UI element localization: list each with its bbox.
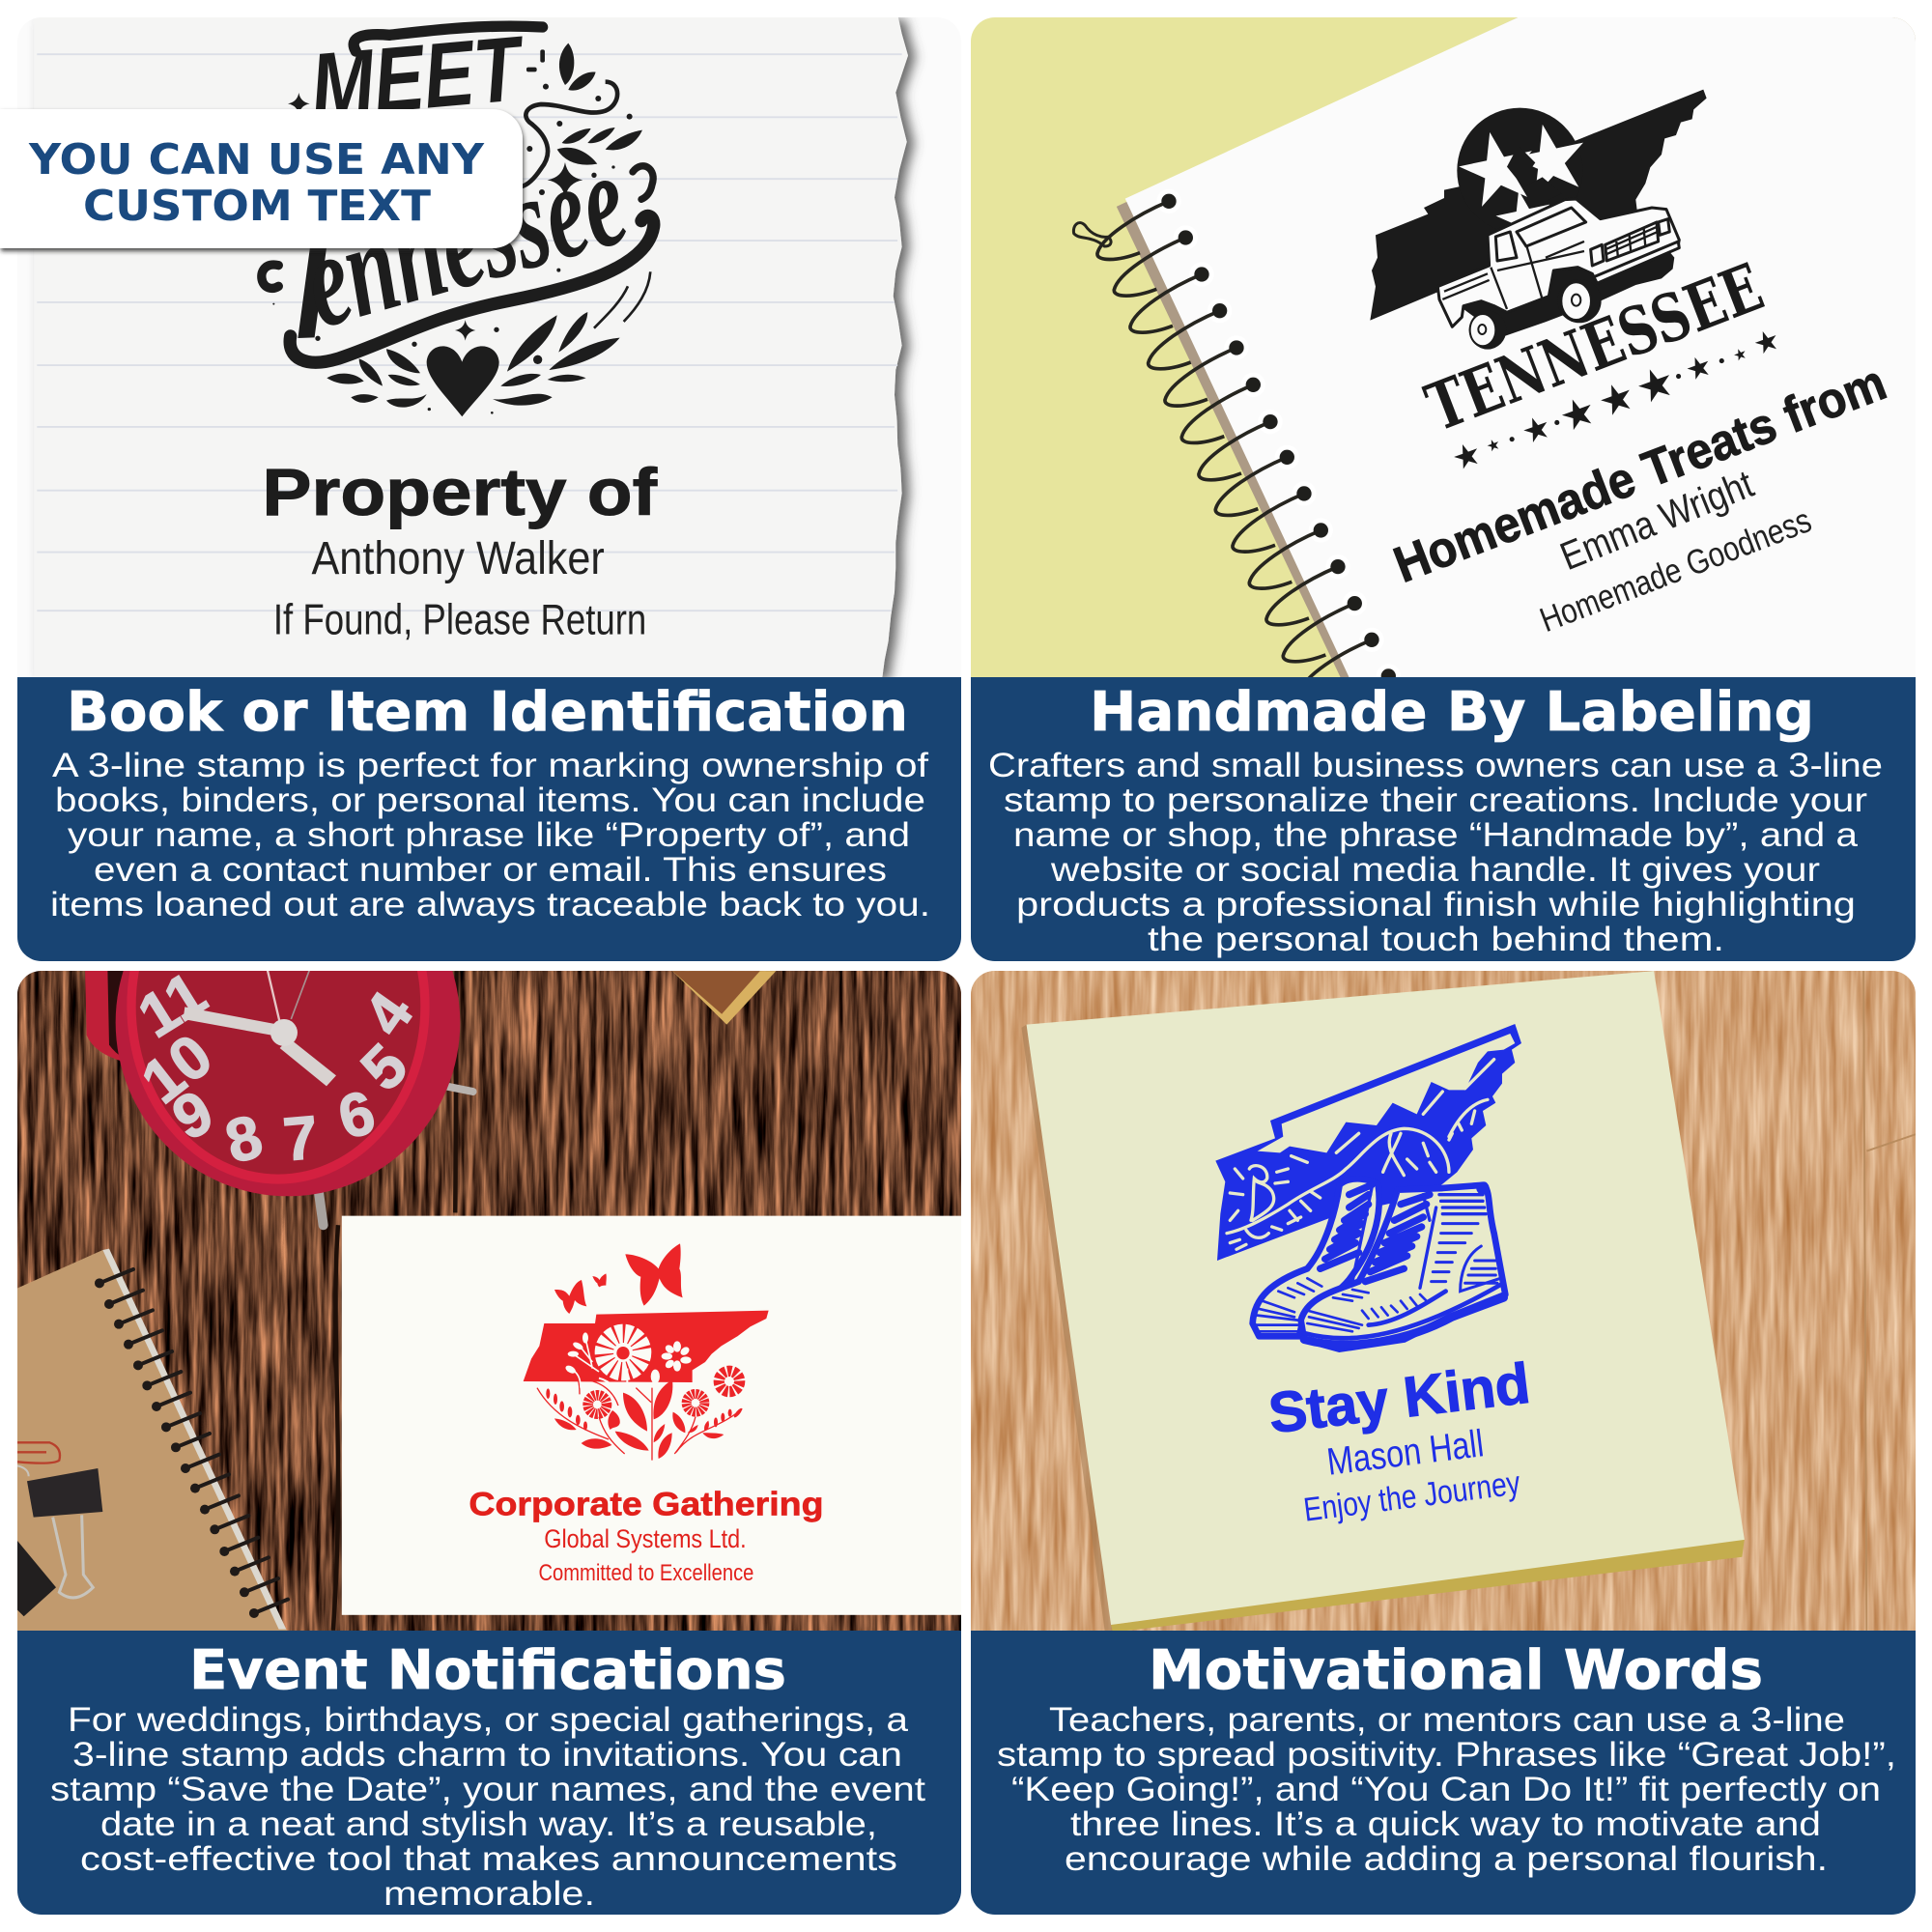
stamp text: Global Systems Ltd.: Global Systems Ltd.: [544, 1524, 747, 1553]
kraft notebook with binding and clips: [14, 1249, 288, 1633]
caption band: [971, 677, 1916, 961]
stamp artwork: Meet Tennessee lettering: MEET: [307, 17, 529, 138]
callout: you can use any custom text: CUSTOM TEXT: [83, 182, 431, 231]
body text: memorable.: [384, 1875, 595, 1913]
stamp artwork: Meet Tennessee lettering: T: [254, 150, 383, 384]
body text: products a professional finish while highlighting: [1016, 886, 1856, 923]
body text: [50, 747, 930, 923]
icon: Tennessee state with tri-star and pickup truck: [1370, 90, 1707, 350]
stamp text: If Found, Please Return: If Found, Please Return: [273, 596, 646, 643]
caption band: [17, 677, 961, 961]
stamp text: Enjoy the Journey: Enjoy the Journey: [1301, 1464, 1522, 1529]
icon: Tennessee with hiking boots: [1215, 1024, 1521, 1350]
photo: torn lined paper with stamp: [34, 17, 908, 678]
body text: date in a neat and stylish way. It’s a reusable,: [100, 1805, 877, 1843]
body text: Teachers, parents, or mentors can use a 3-line: [1049, 1701, 1845, 1739]
body text: website or social media handle. It gives your: [1050, 851, 1820, 889]
body text: the personal touch behind them.: [1148, 921, 1724, 958]
icon: red alarm clock: 9: [162, 1078, 224, 1153]
stamp text: Homemade Treats from: Homemade Treats from: [1387, 355, 1893, 594]
icon: red alarm clock: 4: [352, 980, 426, 1047]
icon: red alarm clock: 6: [331, 1078, 382, 1152]
panel: book or item identification: [17, 17, 961, 961]
stamp text group: [1387, 247, 1893, 639]
panel: motivational words: [971, 971, 1918, 1915]
photo: sticky note on light wood: [971, 971, 1918, 1633]
stamp artwork: Meet Tennessee lettering: [254, 17, 654, 416]
heading: Book or Item Identification: [67, 681, 908, 744]
body text: even a contact number or email. This ensures: [94, 851, 887, 889]
photo: spiral notebook on yellow: [966, 13, 1928, 685]
panel: handmade by labeling: [966, 13, 1928, 961]
body text: books, binders, or personal items. You can include: [55, 781, 925, 819]
white card: [342, 1216, 965, 1615]
body text: For weddings, birthdays, or special gatherings, a: [68, 1701, 909, 1739]
body text: [50, 1701, 925, 1913]
body text: stamp to personalize their creations. Include your: [1004, 781, 1867, 819]
body text: “Keep Going!”, and “You Can Do It!” fit perfectly on: [1011, 1771, 1881, 1808]
stamp text: Emma Wright: Emma Wright: [1554, 461, 1760, 579]
icon: red alarm clock: 8: [218, 1102, 270, 1177]
stamp text: Committed to Excellence: Committed to Excellence: [538, 1560, 753, 1586]
body text: your name, a short phrase like “Property of”, and: [68, 816, 910, 854]
body text: three lines. It’s a quick way to motivate and: [1070, 1805, 1821, 1843]
caption band: [971, 1631, 1916, 1915]
icon: red alarm clock: 5: [349, 1032, 420, 1103]
leather book corner: [672, 971, 776, 1025]
body text: encourage while adding a personal flourish.: [1065, 1840, 1828, 1878]
body text: Crafters and small business owners can use a 3-line: [988, 747, 1883, 784]
heading: Event Notifications: [189, 1639, 786, 1702]
stamp text: Corporate Gathering: Corporate Gathering: [469, 1486, 824, 1522]
photo: wooden desk background: [17, 971, 963, 1631]
stamp text: Property of: Property of: [262, 455, 658, 529]
stamp text: Anthony Walker: Anthony Walker: [311, 532, 605, 584]
stamp text: TENNESSEE: TENNESSEE: [1416, 247, 1773, 446]
callout: you can use any custom text: YOU CAN USE ANY: [28, 135, 485, 185]
notebook spiral binding: [1073, 189, 1401, 734]
icon: red alarm clock: 7: [281, 1104, 321, 1174]
stamp text: Stay Kind: Stay Kind: [1265, 1352, 1533, 1445]
body text: stamp to spread positivity. Phrases like “Great Job!”,: [997, 1736, 1896, 1774]
body text: [988, 747, 1883, 958]
stars row: [1451, 327, 1780, 470]
stamp text: Mason Hall: Mason Hall: [1324, 1422, 1486, 1484]
caption band: [17, 1631, 961, 1915]
body text: name or shop, the phrase “Handmade by”, and a: [1013, 816, 1859, 854]
icon: red alarm clock: [85, 829, 473, 1225]
heading: Handmade By Labeling: [1090, 681, 1814, 744]
body text: cost-effective tool that makes announcements: [80, 1840, 897, 1878]
heading: Motivational Words: [1149, 1639, 1763, 1702]
body text: items loaned out are always traceable back to you.: [50, 886, 930, 923]
stamp text: Homemade Goodness: Homemade Goodness: [1535, 500, 1816, 639]
body text: A 3-line stamp is perfect for marking ownership of: [52, 747, 928, 784]
panel: event notifications: [14, 829, 965, 1915]
body text: [997, 1701, 1896, 1878]
body text: 3-line stamp adds charm to invitations. You can: [72, 1736, 902, 1774]
body text: stamp “Save the Date”, your names, and the event: [50, 1771, 925, 1808]
stamp artwork: Meet Tennessee lettering: ennessee: [287, 124, 641, 356]
icon: red alarm clock: 10: [129, 1022, 225, 1117]
boot laces and hatching: [1256, 1185, 1504, 1345]
icon: red alarm clock: 11: [128, 959, 217, 1051]
callout: you can use any custom text: [0, 109, 523, 248]
icon: Tennessee with flowers and butterflies: [524, 1243, 769, 1461]
